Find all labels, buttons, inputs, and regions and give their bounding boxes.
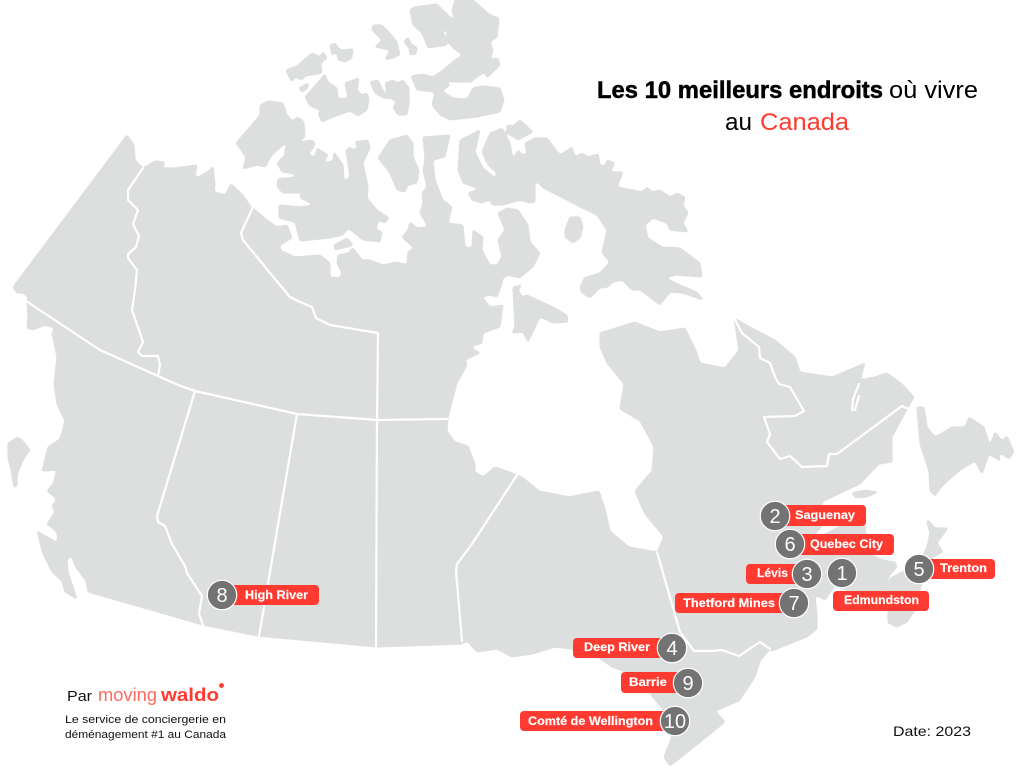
marker 4: Deep River: 4 <box>666 638 678 660</box>
waldo: waldo <box>160 685 219 705</box>
Meighen Island <box>404 37 417 55</box>
marker 3: Lévis: 3 <box>801 564 813 586</box>
brand logo <box>67 683 224 705</box>
marker 10: Comté de Wellington: 10 <box>664 711 686 733</box>
Melville Island <box>286 52 327 82</box>
logo dot <box>219 683 224 688</box>
marker 6: Quebec City: Quebec City <box>810 539 884 551</box>
brand tagline: Le service de conciergerie en <box>65 714 226 726</box>
marker 7: Thetford Mines: Thetford Mines <box>683 598 775 610</box>
marker 7: Thetford Mines <box>675 588 809 618</box>
small island <box>299 83 308 92</box>
Newfoundland <box>917 407 1014 496</box>
title second line: au <box>725 109 752 136</box>
marker 8: High River: 8 <box>216 585 228 607</box>
marker 6: Quebec City <box>775 529 894 559</box>
marker 5: Trenton: Trenton <box>940 563 987 575</box>
Banks Island <box>236 101 305 169</box>
Southampton Island <box>512 285 568 342</box>
Prince of Wales Island <box>378 135 419 192</box>
Cornwallis group <box>370 80 409 115</box>
Bylot Island <box>507 120 533 140</box>
Borden Island <box>330 43 353 62</box>
marker 2: Saguenay: Saguenay <box>795 510 856 522</box>
marker 9: Barrie: 9 <box>682 673 694 695</box>
Bathurst group <box>305 74 369 122</box>
Ellesmere and Devon Islands <box>411 0 504 120</box>
title regular part: où vivre <box>889 77 978 104</box>
title Canada in red: Canada <box>760 109 850 136</box>
date: Date: 2023 <box>893 723 971 739</box>
mainland Canada <box>13 135 914 766</box>
marker 4: Deep River <box>573 633 687 663</box>
moving: moving <box>98 685 157 705</box>
brand tagline <box>65 714 227 741</box>
Nova Scotia and Cape Breton <box>888 520 948 627</box>
marker 8: High River: High River <box>245 590 309 602</box>
title <box>597 77 978 136</box>
marker 5: Trenton <box>904 554 995 584</box>
marker 10: Comté de Wellington: Comté de Wellington <box>528 716 653 728</box>
Baffin Island <box>458 128 703 305</box>
marker 5: Trenton: 5 <box>913 559 925 581</box>
Prince Charles Island <box>565 217 583 243</box>
marker 7: Thetford Mines: 7 <box>788 593 800 615</box>
Haida Gwaii <box>8 437 30 487</box>
marker 8: High River <box>207 580 319 610</box>
marker 1: Edmundston <box>827 558 929 611</box>
marker 4: Deep River: Deep River <box>584 642 651 654</box>
Ellef Ringnes Island <box>372 25 400 60</box>
Par: Par <box>67 688 92 705</box>
Anticosti Island <box>852 490 878 498</box>
marker 1: Edmundston: 1 <box>836 563 848 585</box>
marker 9: Barrie <box>621 668 703 698</box>
marker 2: Saguenay <box>760 501 866 531</box>
marker 1: Edmundston: Edmundston <box>844 595 919 607</box>
marker 3: Lévis: Lévis <box>757 568 788 580</box>
Axel Heiberg Island <box>410 4 453 48</box>
marker 6: Quebec City: 6 <box>784 534 796 556</box>
provincial borders <box>26 168 909 656</box>
Victoria Island <box>277 140 389 242</box>
marker 2: Saguenay: 2 <box>769 506 781 528</box>
marker 9: Barrie: Barrie <box>629 677 667 689</box>
marker 3: Lévis <box>746 559 822 589</box>
King William Island <box>334 238 353 250</box>
title bold part: Les 10 meilleurs endroits <box>597 77 883 104</box>
brand tagline: déménagement #1 au Canada <box>65 729 227 741</box>
marker 10: Comté de Wellington <box>520 706 690 736</box>
